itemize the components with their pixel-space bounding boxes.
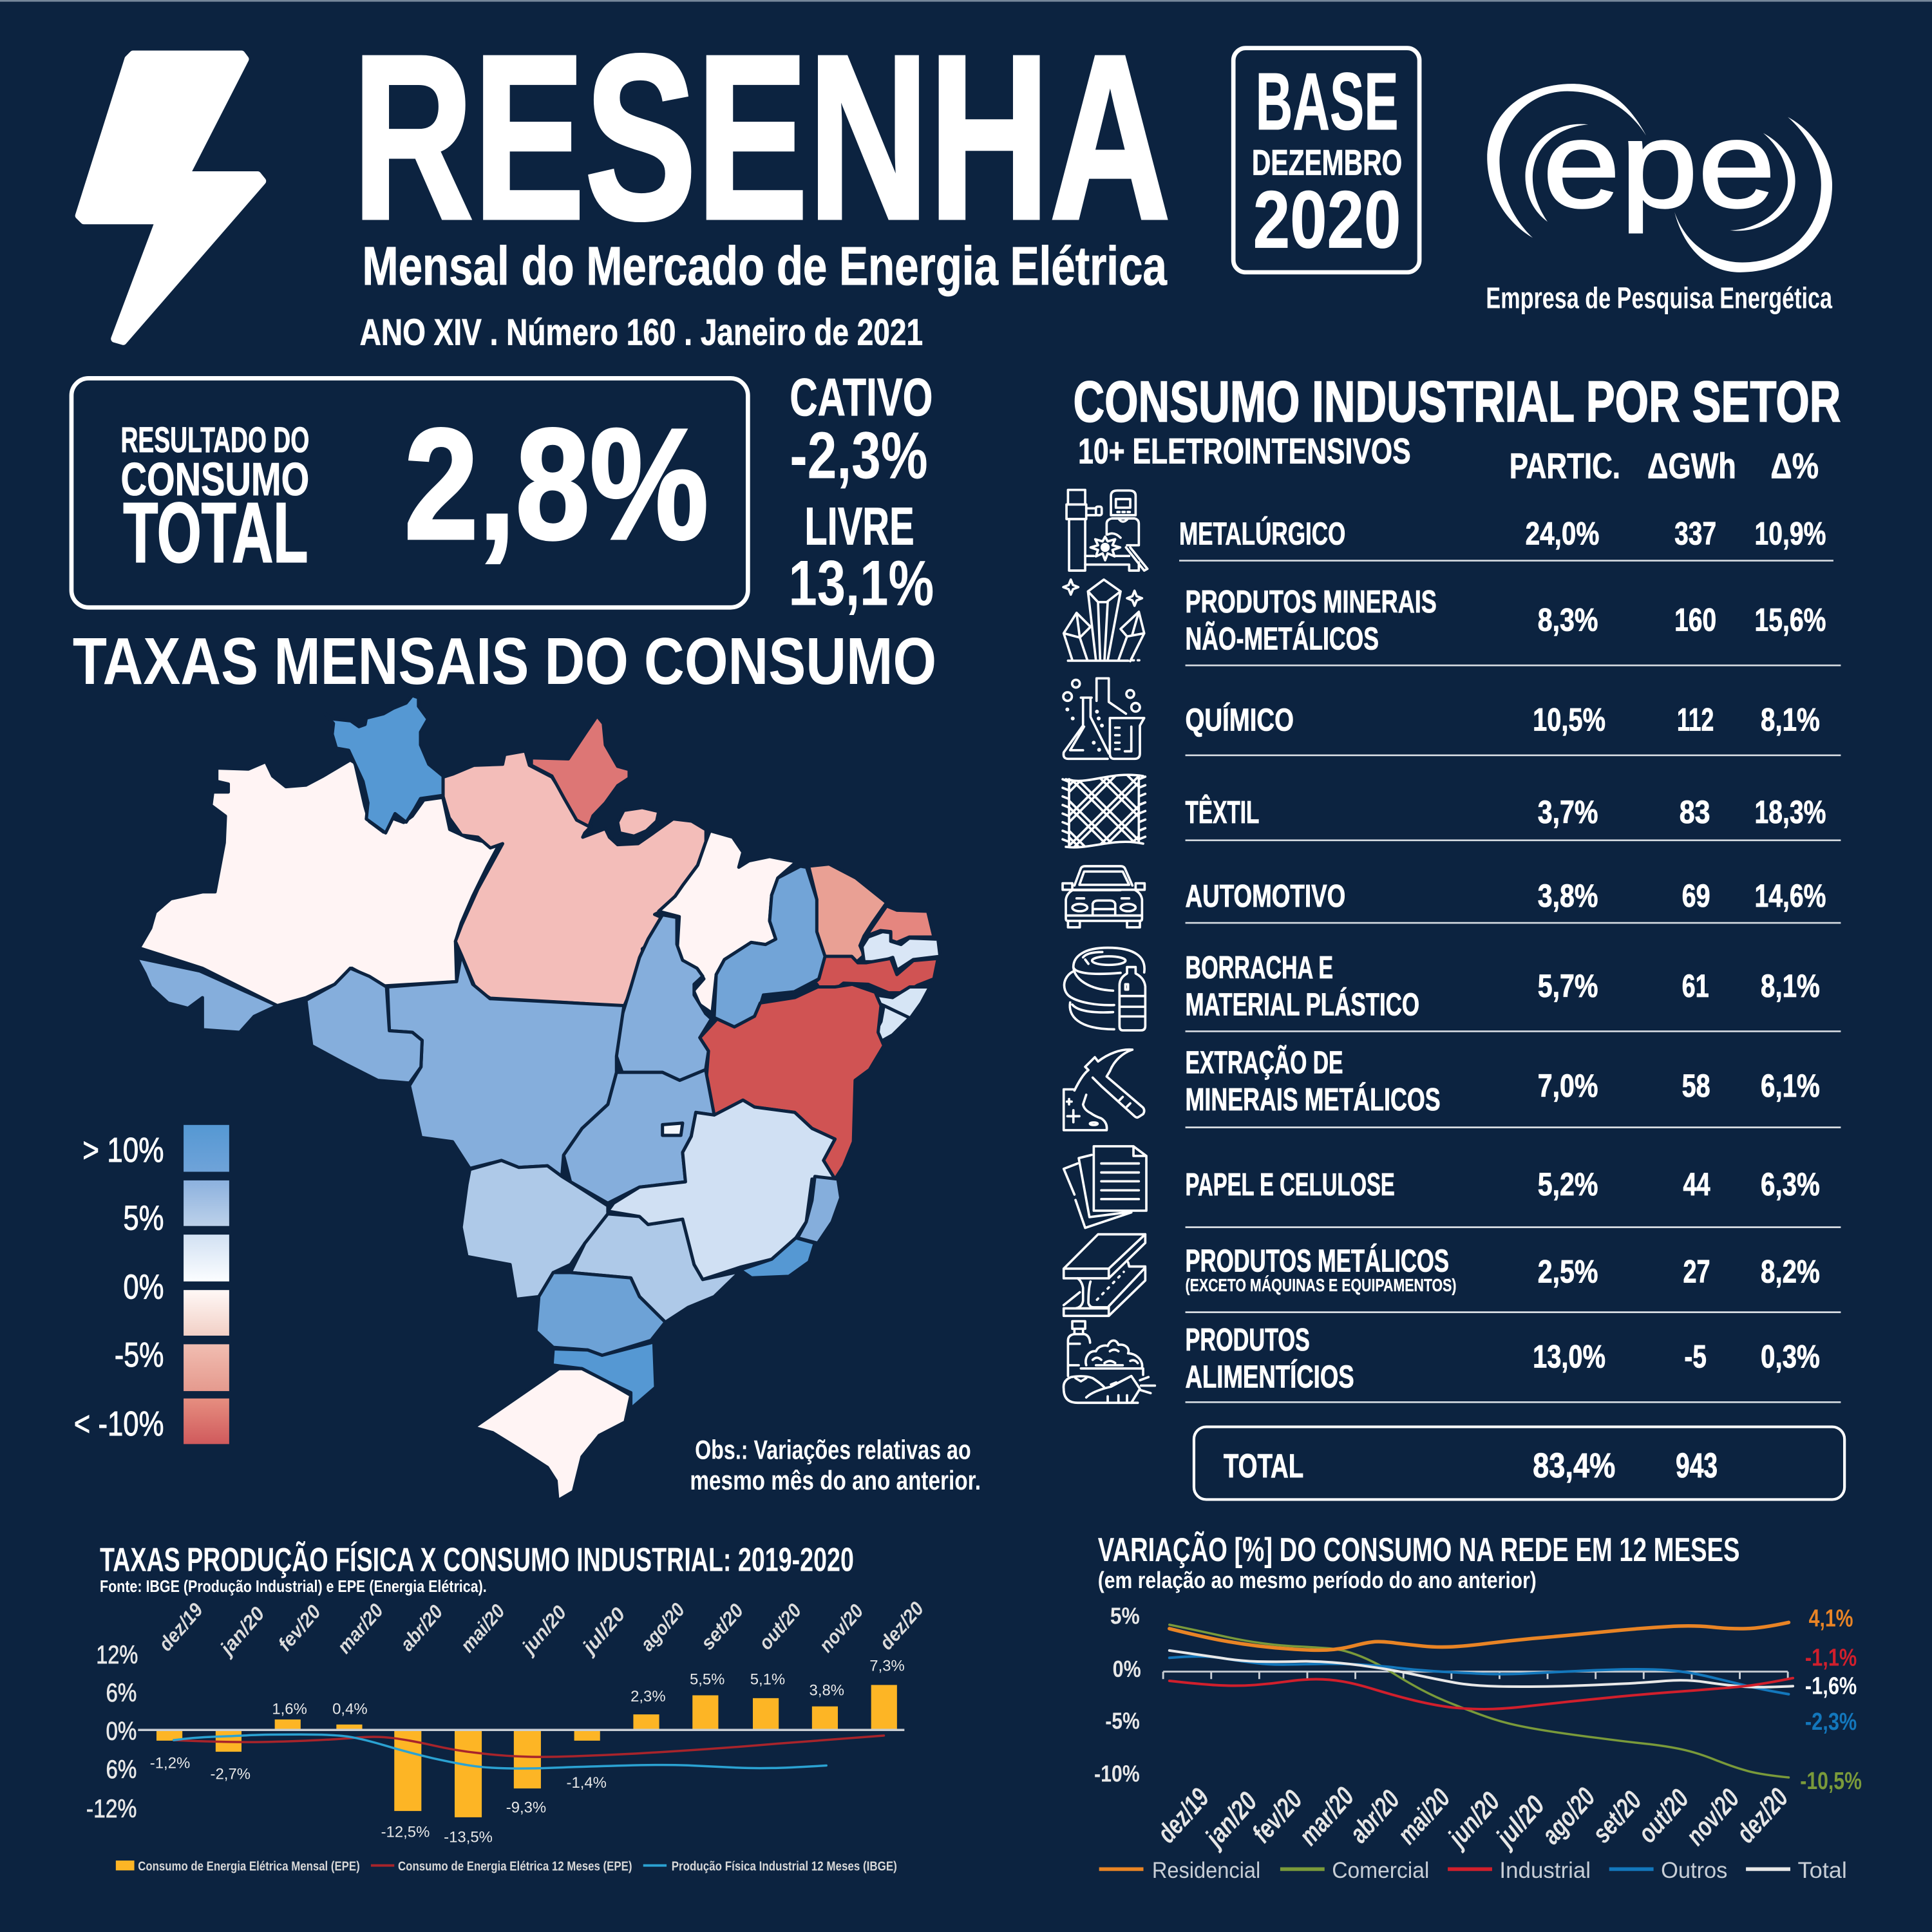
end value labels: 4,1% (1809, 1605, 1853, 1633)
icon: pickaxe (1064, 1050, 1144, 1130)
row: extração de minerais metálicos: 58 (1682, 1068, 1710, 1104)
y axis labels: 6% (106, 1678, 137, 1707)
month labels: ago/20 (636, 1599, 689, 1655)
state: São Paulo (571, 1214, 740, 1322)
month labels: fev/20 (274, 1601, 325, 1655)
row: produtos metálicos (1064, 1235, 1841, 1316)
y axis labels (86, 1640, 138, 1823)
month labels: set/20 (1586, 1785, 1647, 1848)
state: Mato Grosso do Sul (461, 1160, 608, 1299)
bar value labels: 2,3% (630, 1688, 666, 1705)
row: produtos alimentícios: 13,0% (1533, 1339, 1605, 1375)
month labels: jan/20 (214, 1603, 269, 1661)
subtitle: Mensal do Mercado de Energia Elétrica (362, 236, 1168, 296)
panel: resultado do consumo total: RESULTADO DO (120, 420, 309, 460)
month labels: fev/20 (1246, 1784, 1308, 1848)
month labels (1151, 1781, 1794, 1854)
issue line: ANO XIV . Número 160 . Janeiro de 2021 (360, 312, 923, 354)
subheading: 10+ ELETROINTENSIVOS (1078, 431, 1411, 471)
logo: epe: epe (1542, 95, 1776, 233)
row: produtos alimentícios: ALIMENTÍCIOS (1186, 1359, 1354, 1394)
month labels: set/20 (697, 1600, 748, 1654)
bar value labels: -13,5% (444, 1828, 493, 1846)
row: produtos minerais não-metálicos: 8,3% (1538, 602, 1598, 638)
row: extração de minerais metálicos: 7,0% (1538, 1068, 1598, 1104)
icon: welder (1066, 490, 1148, 571)
month labels: jul/20 (1488, 1790, 1550, 1854)
state: Amazonas (139, 760, 498, 1006)
bar value labels: 3,8% (810, 1682, 844, 1700)
state: Espírito Santo (798, 1177, 841, 1243)
y axis labels: -10% (1094, 1761, 1140, 1787)
y axis labels: 12% (96, 1640, 138, 1669)
state: Minas Gerais (608, 1100, 835, 1280)
row: metalúrgico: 10,9% (1754, 516, 1826, 552)
y axis labels: 6% (106, 1755, 137, 1784)
side values: cativo and livre: -2,3% (790, 417, 928, 492)
row: têxtil: 3,7% (1538, 794, 1598, 830)
chart legend: Residencial (1152, 1858, 1260, 1883)
icon: car (1063, 866, 1144, 927)
side values: cativo and livre: LIVRE (804, 498, 914, 556)
state: Tocantins (616, 915, 712, 1081)
bar value labels: -1,2% (150, 1755, 190, 1772)
badge: base dezembro 2020 (1233, 48, 1419, 272)
side values: cativo and livre (788, 368, 934, 619)
panel: resultado do consumo total: TOTAL (123, 484, 308, 580)
map legend: > 10% (82, 1132, 164, 1170)
chart legend (1099, 1858, 1847, 1883)
chart legend: Outros (1661, 1858, 1727, 1883)
bar value labels: 5,1% (750, 1671, 785, 1688)
note: observação: mesmo mês do ano anterior. (690, 1465, 981, 1495)
month labels: jun/20 (516, 1602, 571, 1660)
bar value labels: 5,5% (690, 1671, 724, 1688)
chart title: TAXAS PRODUÇÃO FÍSICA X CONSUMO INDUSTRIAL: 2019-2020 (100, 1540, 854, 1578)
row: papel e celulose: 5,2% (1538, 1166, 1598, 1202)
table column headers: ΔGWh (1647, 446, 1736, 486)
state: Distrito Federal (663, 1123, 683, 1135)
month labels: out/20 (1632, 1783, 1694, 1848)
row: produtos alimentícios: -5 (1684, 1339, 1707, 1375)
badge: base dezembro 2020: DEZEMBRO (1252, 143, 1402, 183)
month labels: dez/20 (1730, 1783, 1794, 1848)
month labels: mar/20 (333, 1600, 388, 1658)
chart legend: Consumo de Energia Elétrica Mensal (EPE) (138, 1859, 360, 1873)
total row (1194, 1427, 1844, 1499)
row: papel e celulose: 6,3% (1761, 1166, 1820, 1202)
row: produtos metálicos: 2,5% (1538, 1254, 1598, 1290)
state: Rio Grande do Sul (474, 1368, 631, 1501)
state: Paraná (536, 1273, 665, 1356)
month labels: abr/20 (1343, 1784, 1405, 1848)
logo: epe (1486, 84, 1832, 314)
note: observação: Obs.: Variações relativas ao (695, 1434, 971, 1464)
month labels: mai/20 (1392, 1783, 1456, 1850)
badge: base dezembro 2020: BASE (1256, 56, 1399, 147)
end value labels: -2,3% (1805, 1708, 1857, 1736)
side values: cativo and livre: 13,1% (788, 547, 934, 619)
row: produtos minerais não-metálicos: 15,6% (1754, 602, 1826, 638)
row: extração de minerais metálicos: MINERAIS METÁLICOS (1186, 1083, 1441, 1117)
month labels: dez/19 (1151, 1782, 1215, 1848)
icon: textile (1061, 773, 1146, 849)
row: automotivo: 3,8% (1538, 878, 1598, 914)
y axis labels: 0% (106, 1717, 137, 1746)
chart legend: Industrial (1499, 1858, 1591, 1883)
row: metalúrgico (1066, 490, 1833, 571)
bar value labels: -9,3% (506, 1799, 546, 1816)
end value labels: -1,1% (1805, 1644, 1857, 1672)
state: Roraima (325, 696, 443, 833)
series: comercial (1170, 1625, 1788, 1777)
chart legend: Total (1797, 1858, 1847, 1883)
chart source: Fonte: IBGE (Produção Industrial) e EPE (Energia Elétrica). (100, 1578, 487, 1596)
series: outros (1170, 1656, 1788, 1694)
state: Pernambuco (813, 956, 938, 997)
title block (352, 7, 1171, 354)
zero axis with ticks (1163, 1672, 1788, 1679)
bar value labels: 1,6% (272, 1700, 307, 1718)
month labels: jul/20 (576, 1604, 630, 1660)
row: extração de minerais metálicos (1064, 1045, 1841, 1130)
y axis labels: 5% (1110, 1603, 1140, 1629)
chart legend: Comercial (1332, 1858, 1429, 1883)
total row: 943 (1676, 1447, 1718, 1485)
chart legend (116, 1859, 897, 1873)
bars: consumo mensal (156, 1685, 897, 1817)
map legend: -5% (115, 1336, 164, 1374)
row: têxtil (996, 773, 1841, 858)
y axis labels: 0% (1113, 1656, 1141, 1682)
series: residencial (1170, 1622, 1788, 1650)
end value labels: -1,6% (1805, 1672, 1857, 1700)
chart subtitle: (em relação ao mesmo período do ano anterior) (1098, 1567, 1537, 1593)
series: industrial (1170, 1678, 1793, 1709)
row: produtos metálicos: 8,2% (1761, 1254, 1820, 1290)
state: Rio de Janeiro (740, 1238, 815, 1278)
row: extração de minerais metálicos: EXTRAÇÃO DE (1186, 1045, 1343, 1080)
row: produtos alimentícios: 0,3% (1761, 1339, 1820, 1375)
row: borracha e material plástico: 5,7% (1538, 968, 1598, 1004)
map: Brazil states (137, 696, 940, 1501)
state: Rondônia (306, 968, 422, 1083)
panel: resultado do consumo total: CONSUMO (120, 453, 309, 506)
heading: taxas mensais do consumo: TAXAS MENSAIS DO CONSUMO (73, 623, 936, 698)
month labels: mai/20 (457, 1600, 509, 1656)
row: borracha e material plástico: BORRACHA E (1186, 951, 1333, 985)
bar value labels: -2,7% (211, 1766, 251, 1783)
northern states (325, 696, 940, 1027)
month labels: nov/20 (815, 1600, 867, 1656)
side values: cativo and livre: CATIVO (790, 368, 933, 427)
island: Marajó (618, 808, 659, 836)
month labels: ago/20 (1535, 1782, 1601, 1850)
state: Maranhão (659, 831, 796, 1013)
row: químico (1063, 678, 1841, 759)
map legend: < -10% (74, 1405, 164, 1443)
y axis labels: -12% (86, 1794, 137, 1823)
row: metalúrgico: 24,0% (1526, 516, 1599, 552)
row: automotivo: AUTOMOTIVO (1186, 879, 1345, 914)
row: papel e celulose: PAPEL E CELULOSE (1186, 1168, 1395, 1202)
title: RESENHA: RESENHA (352, 7, 1171, 269)
end value labels: -10,5% (1800, 1767, 1862, 1795)
panel: taxas produção física x consumo industrial (86, 1540, 928, 1873)
table column headers: PARTIC. (1510, 446, 1620, 486)
icon: paper sheets (1064, 1146, 1146, 1228)
row: borracha e material plástico: 61 (1682, 968, 1709, 1004)
icon: steel I-beam (1064, 1235, 1145, 1316)
month labels: nov/20 (1680, 1783, 1745, 1851)
state: Ceará (809, 864, 887, 963)
state: Pará (443, 751, 706, 1007)
map legend: 5% (123, 1199, 164, 1237)
month labels: jan/20 (1197, 1786, 1263, 1854)
row: produtos minerais não-metálicos (1063, 580, 1841, 665)
row: borracha e material plástico: MATERIAL PLÁSTICO (1186, 988, 1419, 1023)
state: Piauí (714, 866, 825, 1027)
central and southern states (137, 915, 930, 1501)
row: produtos alimentícios: PRODUTOS (1186, 1323, 1310, 1358)
row: produtos minerais não-metálicos: PRODUTOS MINERAIS (1186, 585, 1437, 620)
month labels: mar/20 (1293, 1781, 1360, 1851)
icon: rubber rolls and bottle (1065, 948, 1145, 1030)
row: metalúrgico: METALÚRGICO (1179, 516, 1345, 552)
row: extração de minerais metálicos: 6,1% (1761, 1068, 1820, 1104)
total row: 83,4% (1533, 1447, 1615, 1485)
month labels (155, 1598, 928, 1661)
row: químico: 112 (1677, 702, 1714, 738)
icon: lightning bolt (79, 54, 263, 341)
line series (1170, 1622, 1793, 1777)
row: produtos metálicos: (EXCETO MÁQUINAS E EQUIPAMENTOS) (1186, 1275, 1456, 1295)
month labels: abr/20 (396, 1601, 447, 1655)
y axis labels (1094, 1603, 1141, 1787)
icon: food (1064, 1321, 1155, 1403)
chart legend: Consumo de Energia Elétrica 12 Meses (EPE) (398, 1859, 632, 1873)
line series: consumo 12 meses and produção física (174, 1734, 884, 1768)
table column headers (1510, 446, 1819, 486)
row: borracha e material plástico: 8,1% (1761, 968, 1820, 1004)
state: Paraíba (862, 932, 940, 971)
panel: resultado do consumo total (71, 378, 748, 607)
map legend: 0% (123, 1269, 164, 1307)
row: borracha e material plástico (1065, 948, 1841, 1031)
state: Mato Grosso (388, 955, 624, 1177)
value: 2,8%: 2,8% (404, 395, 708, 572)
icon: crystals (1063, 580, 1144, 661)
row: produtos minerais não-metálicos: NÃO-METÁLICOS (1186, 621, 1379, 656)
row: químico: 8,1% (1761, 702, 1820, 738)
state: Acre (137, 958, 277, 1032)
month labels: out/20 (755, 1600, 806, 1654)
row: automotivo: 14,6% (1754, 878, 1826, 914)
state: Bahia (700, 984, 884, 1179)
total row: TOTAL (1224, 1447, 1303, 1484)
zero axis (138, 1729, 904, 1730)
month labels: dez/19 (155, 1599, 207, 1655)
state: Santa Catarina (552, 1342, 656, 1408)
state: Rio Grande do Norte (866, 906, 934, 942)
state: Goiás (564, 1070, 714, 1203)
month labels: jun/20 (1440, 1786, 1506, 1854)
row: produtos metálicos: 27 (1683, 1254, 1710, 1290)
bar value labels: 7,3% (869, 1657, 905, 1674)
row: têxtil: 83 (1680, 794, 1710, 830)
row: automotivo (1063, 866, 1841, 927)
row: automotivo: 69 (1682, 878, 1710, 914)
table column headers: Δ% (1770, 446, 1819, 486)
chart legend: Produção Física Industrial 12 Meses (IBGE) (672, 1859, 897, 1873)
icon: flask and beaker (1063, 678, 1144, 759)
bar value labels: -1,4% (566, 1774, 607, 1792)
panel: variação do consumo na rede em 12 meses (1094, 1531, 1862, 1883)
badge: base dezembro 2020: 2020 (1253, 175, 1401, 265)
row: químico: QUÍMICO (1186, 703, 1294, 738)
row: produtos metálicos: PRODUTOS METÁLICOS (1186, 1244, 1449, 1278)
row: papel e celulose (1064, 1146, 1841, 1228)
state: Alagoas (875, 987, 930, 1019)
map legend (74, 1125, 229, 1444)
row: papel e celulose: 44 (1683, 1166, 1710, 1202)
series: total (1170, 1651, 1793, 1687)
state: Amapá (531, 716, 629, 826)
bar value labels: -12,5% (381, 1824, 430, 1841)
row: têxtil: 18,3% (1754, 794, 1826, 830)
row: produtos alimentícios (1064, 1321, 1841, 1403)
y axis labels: -5% (1105, 1707, 1140, 1734)
month labels: dez/20 (875, 1598, 928, 1654)
row: químico: 10,5% (1533, 702, 1605, 738)
bar value labels (150, 1657, 905, 1846)
note: observação (690, 1434, 981, 1495)
state: Sergipe (875, 1006, 910, 1041)
row: têxtil: TÊXTIL (1186, 795, 1259, 830)
panel: consumo industrial por setor (996, 370, 1844, 1499)
row: metalúrgico: 337 (1674, 516, 1716, 552)
end value labels (1800, 1605, 1862, 1795)
bar value labels: 0,4% (332, 1700, 368, 1718)
row: produtos minerais não-metálicos: 160 (1674, 602, 1716, 638)
